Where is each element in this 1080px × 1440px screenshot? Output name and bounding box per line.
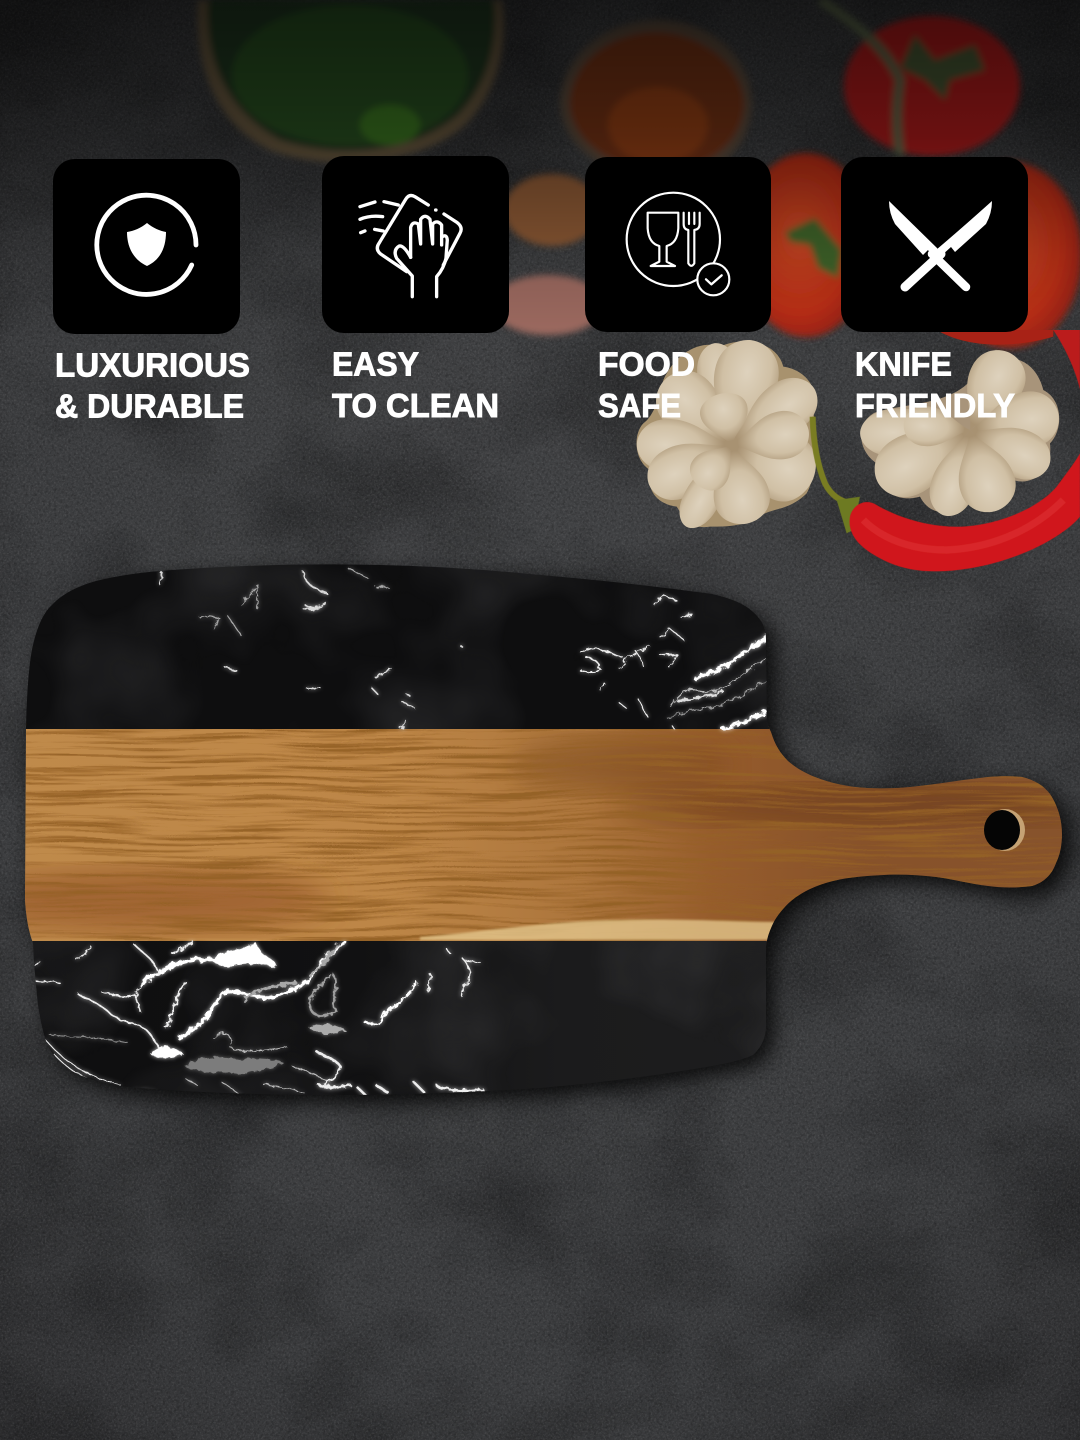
tomatoes middle [740,153,1080,348]
feature 1: luxurious & durable [53,159,250,424]
board hanging hole [984,809,1025,851]
garlic left [637,334,829,535]
feature 2: easy to clean [322,156,509,424]
blurred food props [0,0,1080,571]
cutting board [0,560,1080,1111]
bowl of spice [560,20,752,172]
feature 3: food safe: SAFE [598,387,681,424]
feature 2: easy to clean: TO CLEAN [332,387,499,424]
feature 3: food safe [585,157,771,424]
black marble top band [0,560,800,729]
icon tile: glass and fork [585,157,771,332]
cutting board shadow [33,572,1070,1103]
icon tile: crossed knives [841,157,1028,332]
label: EASY [332,346,419,382]
feature 4: knife friendly [841,157,1028,424]
feature 1: luxurious & durable: & DURABLE [55,388,244,424]
icon tile: shield [53,159,240,334]
black marble bottom band [32,938,767,1095]
garlic right [859,340,1063,522]
label: KNIFE [855,346,952,382]
label: FOOD [598,346,695,382]
shallots [492,174,604,335]
wood strip [0,720,1080,950]
tomato top [820,0,1020,156]
chili [813,330,1080,571]
dark vignette over top props [0,0,1080,340]
bowl of herbs [198,0,504,162]
icon tile: hand wiping [322,156,509,333]
label: LUXURIOUS [55,346,250,384]
feature 4: knife friendly: FRIENDLY [855,387,1015,424]
